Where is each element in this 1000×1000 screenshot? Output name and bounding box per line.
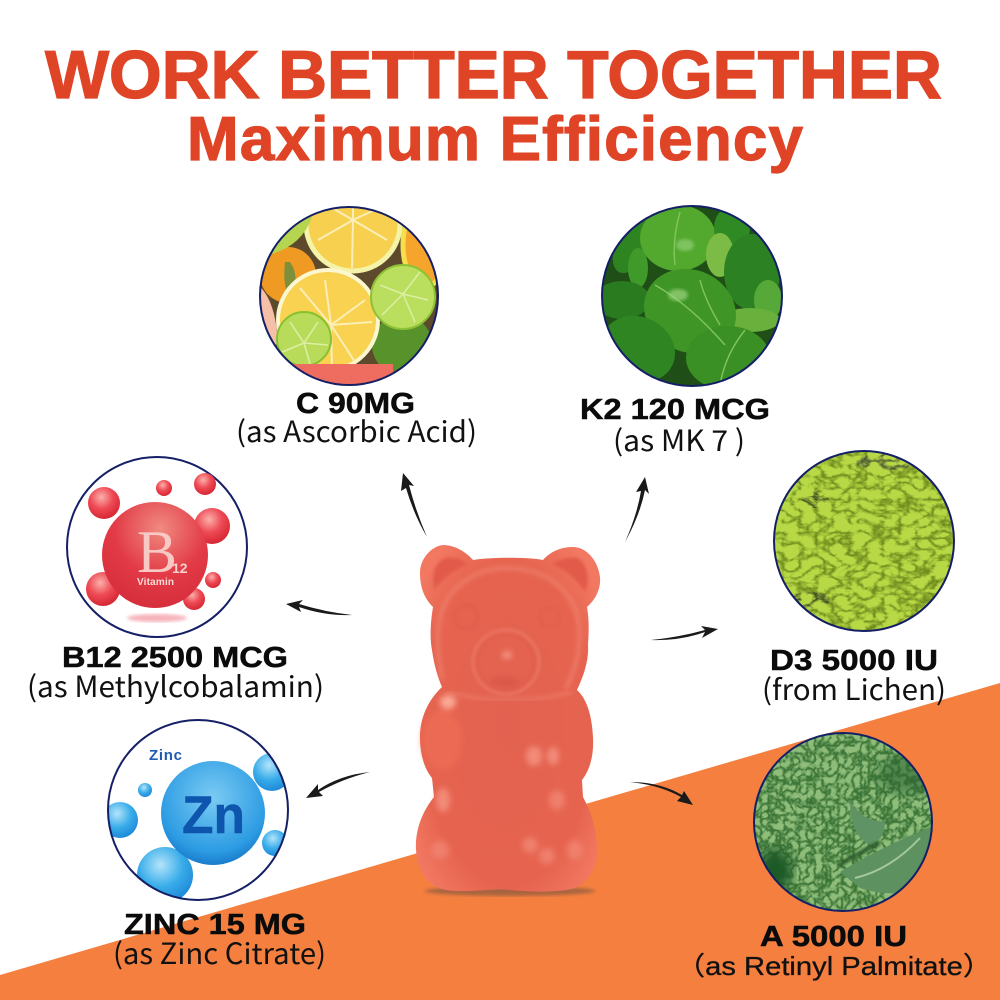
label: K2: [580, 394, 770, 460]
arrow: to vitamin A: [630, 782, 693, 805]
label: vitamin C: C 90MG: [296, 388, 415, 420]
arrow: to vitamin C: [401, 473, 427, 537]
arrow: to B12: [286, 600, 352, 615]
icon: zinc circle: Zinc: [149, 747, 182, 764]
icon: B12 vitamin circle: 12: [172, 560, 188, 576]
icon: B12 vitamin circle: Vitamin: [137, 577, 174, 588]
label: D3: [762, 645, 946, 709]
label: vitamin A: （as Retinyl Palmitate）: [676, 951, 992, 981]
label: D3: (from Lichen): [762, 667, 946, 709]
arrow: to zinc: [306, 772, 370, 798]
label: D3: D3 5000 IU: [770, 645, 938, 677]
bear ears inner: [433, 558, 588, 592]
title: WORK BETTER TOGETHER: [45, 37, 942, 113]
arrow: to K2: [625, 477, 649, 542]
background: orange diagonal: [0, 683, 1000, 1000]
icon: kale circle: [752, 731, 935, 913]
title: [45, 37, 942, 174]
label: vitamin A: [676, 921, 992, 981]
gummy bear: [416, 545, 600, 896]
label: K2: K2 120 MCG: [580, 394, 770, 426]
label: K2: (as MK 7 ): [613, 418, 745, 460]
label: vitamin C: [236, 388, 477, 451]
icon: B12 vitamin circle: B: [137, 519, 177, 585]
label: vitamin A: A 5000 IU: [760, 921, 907, 953]
icon: zinc circle: Zn: [182, 786, 245, 845]
label: vitamin C: (as Ascorbic Acid): [236, 409, 477, 451]
arrow: to D3: [651, 626, 718, 640]
icon: citrus fruit circle: [259, 206, 439, 386]
bear arm and highlights: [422, 651, 583, 864]
label: zinc: [113, 909, 326, 973]
label: B12: [27, 642, 324, 706]
title: Maximum Efficiency: [187, 105, 804, 174]
icon: zinc circle: [102, 720, 291, 903]
label: zinc: (as Zinc Citrate): [113, 931, 326, 973]
label: B12: (as Methylcobalamin): [27, 664, 324, 706]
icon: B12 vitamin circle: [67, 457, 247, 637]
label: zinc: ZINC 15 MG: [124, 909, 306, 941]
icon: spinach circle: [601, 205, 783, 387]
label: B12: B12 2500 MCG: [62, 642, 288, 674]
icon: lichen circle: [772, 449, 956, 633]
bear head contour: [438, 568, 579, 700]
